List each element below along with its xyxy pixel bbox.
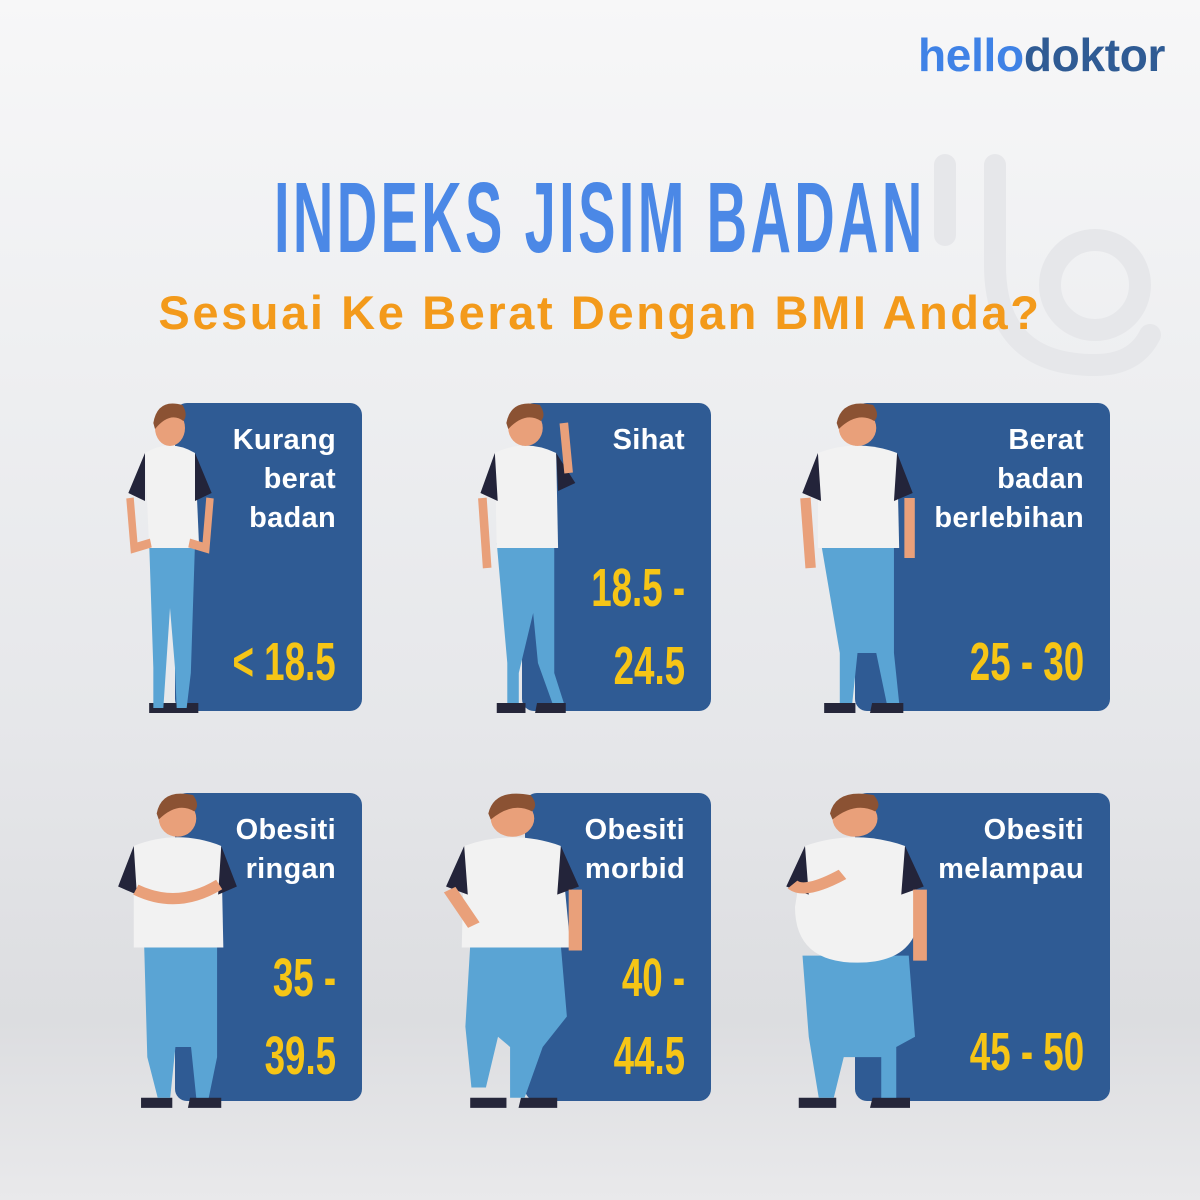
- figure: obesity mild: [118, 794, 237, 1108]
- label: Kurang: [233, 424, 336, 456]
- panel: obesiti melampau: [855, 793, 1110, 1101]
- panel: obesiti ringan: [175, 793, 362, 1101]
- label: Sihat: [613, 424, 685, 456]
- figure: obesity extreme: [786, 794, 927, 1108]
- value: 40 -: [622, 948, 685, 1008]
- label: [934, 424, 1084, 534]
- label: badan: [997, 463, 1084, 495]
- figure: overweight: [800, 404, 915, 713]
- value: [265, 948, 336, 1086]
- label: Obesiti: [236, 814, 336, 846]
- title: INDEKS JISIM BADAN: [274, 162, 926, 274]
- logo: hellodoktor: [918, 29, 1165, 81]
- figure: obesity morbid: [444, 794, 582, 1108]
- value: < 18.5: [233, 632, 336, 692]
- value: 35 -: [273, 948, 336, 1008]
- label: [233, 424, 336, 534]
- value: 18.5 -: [591, 558, 685, 618]
- value: 44.5: [614, 1026, 685, 1086]
- label: [236, 814, 336, 885]
- panel: sihat: [522, 403, 711, 711]
- label: melampau: [938, 853, 1084, 885]
- figure: underweight: [126, 404, 214, 713]
- panel: obesiti morbid: [525, 793, 711, 1101]
- panel: berat badan berlebihan: [855, 403, 1110, 711]
- value: 24.5: [614, 636, 685, 696]
- value: 39.5: [265, 1026, 336, 1086]
- label: Obesiti: [984, 814, 1084, 846]
- label: berat: [264, 463, 336, 495]
- panel: kurang berat badan: [175, 403, 362, 711]
- label: Berat: [1008, 424, 1084, 456]
- watermark logo mark: [934, 154, 1161, 358]
- label: [938, 814, 1084, 885]
- label: Obesiti: [585, 814, 685, 846]
- label: ringan: [246, 853, 336, 885]
- value: [614, 948, 685, 1086]
- value: [591, 558, 685, 696]
- label: berlebihan: [934, 502, 1084, 534]
- value: 45 - 50: [970, 1022, 1084, 1082]
- label: badan: [249, 502, 336, 534]
- label: [585, 814, 685, 885]
- subtitle: Sesuai Ke Berat Dengan BMI Anda?: [158, 286, 1042, 339]
- label: morbid: [585, 853, 685, 885]
- value: 25 - 30: [970, 632, 1084, 692]
- figure: healthy: [478, 404, 576, 713]
